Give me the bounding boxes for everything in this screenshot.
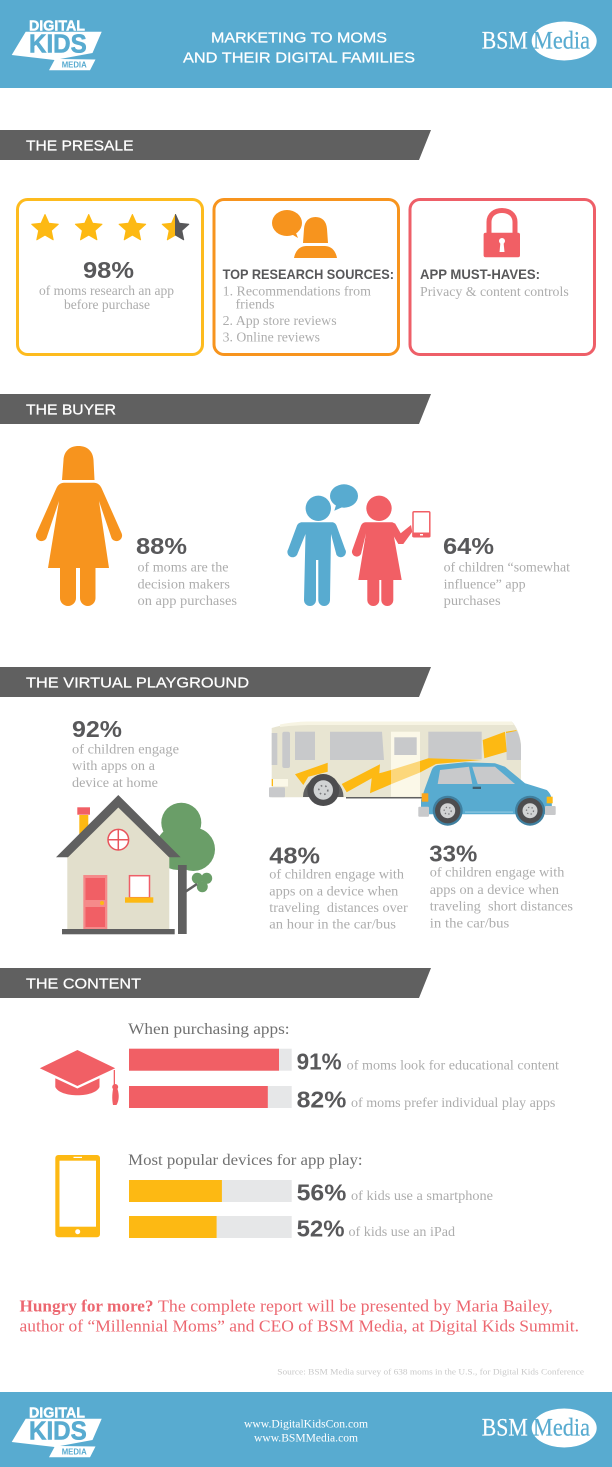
section heading: The Buyer: THE BUYER: [26, 402, 116, 418]
footer links: [244, 1416, 369, 1444]
list: research sources: [223, 285, 371, 346]
stat: 88% moms: of moms are the: [138, 561, 228, 576]
logo: Digital Kids Media: DIGITAL: [29, 19, 85, 35]
icon: mother figure: [36, 446, 122, 606]
stat: 48% long trips: traveling distances over: [269, 901, 408, 916]
stat: 33% short trips: 33%: [429, 841, 477, 867]
logo: Digital Kids Media footer: KIDS: [29, 1416, 87, 1446]
bar: 91%: 91%: [297, 1048, 342, 1074]
stat: 98%: 98%: [83, 257, 134, 283]
list: research sources: 1. Recommendations from: [223, 285, 371, 300]
stat: 88% moms: [136, 533, 237, 609]
section heading: The Presale: [0, 130, 431, 160]
logo: BSM Media footer: BSM: [482, 1414, 528, 1442]
stat: 64% children: of children “somewhat: [444, 561, 570, 576]
logo: BSM Media footer: [482, 1408, 597, 1448]
logo: Digital Kids Media footer: DIGITAL: [29, 1406, 85, 1422]
stat: 48% long trips: 48%: [269, 842, 320, 868]
heading: app must-haves: APP MUST-HAVES:: [420, 266, 540, 282]
stat: 48% long trips: of children engage with: [269, 867, 404, 882]
section heading: The Content: [0, 968, 431, 998]
bar chart: most popular devices: [129, 1180, 493, 1242]
stat: 48% long trips: an hour in the car/bus: [269, 917, 396, 932]
text: most popular devices: Most popular devices for app play:: [128, 1152, 362, 1169]
section heading: The Buyer: [0, 394, 431, 424]
stat: 88% moms: on app purchases: [138, 594, 237, 609]
bar chart: when purchasing apps: [129, 1048, 559, 1112]
bar: 56%: 56%: [297, 1180, 346, 1206]
logo: BSM Media footer: Media: [533, 1414, 590, 1442]
icon: girl with tablet: [352, 496, 430, 606]
source note: Source: BSM Media survey of 638 moms in the U.S., for Digital Kids Conference: [277, 1366, 584, 1376]
section heading: The Presale: THE PRESALE: [26, 138, 134, 154]
stat: 64% children: influence” app: [444, 578, 526, 592]
callout: hungry for more: The complete report will be presented by Maria Bailey,: [158, 1297, 553, 1316]
section heading: The Virtual Playground: THE VIRTUAL PLAYGROUND: [26, 674, 249, 692]
stat: 33% short trips: in the car/bus: [430, 916, 509, 931]
stat: 88% moms: decision makers: [138, 578, 230, 592]
stat: 92% at home: device at home: [72, 776, 158, 791]
icon: house and tree: [56, 795, 215, 934]
stat: 33% short trips: apps on a device when: [430, 883, 559, 898]
icon: car: [418, 762, 556, 826]
bar: 52%: of kids use an iPad: [348, 1225, 455, 1240]
panel: 98% of moms research: [18, 200, 202, 354]
logo: BSM Media: Media: [533, 28, 590, 54]
text: privacy: Privacy & content controls: [420, 285, 569, 300]
text: moms research: of moms research an app: [39, 284, 174, 299]
logo: Digital Kids Media footer: MEDIA: [62, 1448, 87, 1456]
text: when purchasing apps: When purchasing apps:: [128, 1021, 290, 1038]
icon: bus: [269, 722, 521, 806]
stat: 33% short trips: [429, 841, 573, 931]
stat: 33% short trips: traveling short distances: [430, 900, 573, 915]
stat: 92% at home: with apps on a: [72, 759, 156, 774]
stat: 92% at home: 92%: [72, 716, 122, 742]
title: [183, 30, 415, 66]
stat: 64% children: purchases: [444, 594, 501, 609]
panel: top research sources: [214, 200, 398, 354]
callout: hungry for more: author of “Millennial Moms” and CEO of BSM Media, at Digital Kids Summit.: [20, 1317, 579, 1336]
header banner: [0, 0, 612, 88]
bar: 82%: 82%: [297, 1086, 346, 1112]
text: moms research: [39, 284, 174, 313]
stat: 92% at home: of children engage: [72, 742, 179, 757]
callout: hungry for more: [20, 1297, 579, 1336]
text: moms research: before purchase: [64, 298, 150, 313]
list: research sources: 3. Online reviews: [223, 331, 320, 346]
logo: Digital Kids Media: MEDIA: [62, 60, 87, 70]
section heading: The Content: THE CONTENT: [26, 976, 141, 992]
title: MARKETING TO MOMS: [211, 30, 387, 47]
bar: 82%: of moms prefer individual play apps: [351, 1096, 555, 1111]
list: research sources: 2. App store reviews: [223, 314, 337, 329]
stat: 88% moms: 88%: [136, 533, 187, 559]
stat: 64% children: [443, 533, 570, 609]
bar: 52%: [129, 1216, 455, 1242]
icon: person with speech bubble: [272, 210, 337, 258]
section heading: The Virtual Playground: [0, 667, 431, 697]
footer links: www.BSMMedia.com: [254, 1430, 359, 1444]
logo: BSM Media: BSM: [482, 28, 528, 54]
list: research sources: friends: [236, 298, 274, 312]
icon: padlock: [484, 210, 520, 257]
bar: 82%: [129, 1086, 555, 1112]
bar: 91%: of moms look for educational content: [347, 1058, 559, 1074]
logo: BSM Media: [482, 22, 597, 60]
logo: Digital Kids Media: KIDS: [29, 29, 87, 59]
stat: 92% at home: [72, 716, 179, 791]
icon: smartphone: [55, 1155, 100, 1237]
icon: star rating: [32, 214, 189, 240]
heading: top research sources: TOP RESEARCH SOURCES:: [223, 266, 394, 282]
panel: app must-haves: [410, 200, 594, 354]
footer banner: [0, 1392, 612, 1467]
title: AND THEIR DIGITAL FAMILIES: [183, 49, 415, 66]
stat: 48% long trips: apps on a device when: [269, 884, 398, 899]
footer links: www.DigitalKidsCon.com: [244, 1416, 369, 1430]
logo: Digital Kids Media footer: [12, 1406, 102, 1457]
logo: Digital Kids Media: [12, 19, 102, 70]
bar: 56%: [129, 1180, 493, 1206]
stat: 64% children: 64%: [443, 533, 494, 559]
bar: 91%: [129, 1048, 559, 1074]
bar: 52%: 52%: [297, 1216, 345, 1242]
icon: tablet: [412, 512, 430, 537]
stat: 48% long trips: [269, 842, 408, 932]
callout: hungry for more: Hungry for more?: [20, 1297, 154, 1316]
icon: boy with speech bubble: [287, 484, 358, 606]
icon: graduation cap: [40, 1050, 119, 1105]
stat: 33% short trips: of children engage with: [430, 866, 564, 881]
bar: 56%: of kids use a smartphone: [351, 1189, 493, 1204]
